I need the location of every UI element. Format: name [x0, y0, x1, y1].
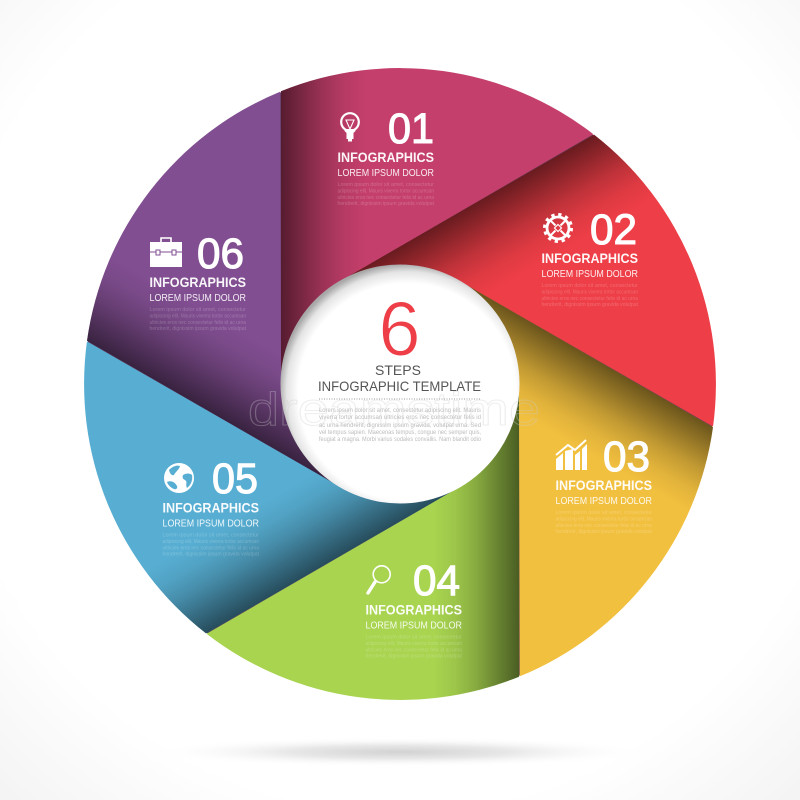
center body text: feugiat a magna. Morbi varius sodales convallis. Nam blandit odio: [319, 437, 482, 443]
sector: yellow: [303, 281, 733, 709]
step number: 03: [603, 433, 650, 481]
sector: purple: [67, 59, 497, 487]
step text: [556, 477, 653, 535]
step text: ultricies eros nec consectetur felis id ac urna: [556, 523, 652, 529]
step text: INFOGRAPHICS: [150, 274, 246, 290]
step text: [150, 274, 247, 332]
step text: Lorem ipsum dolor sit amet, consectetur: [366, 634, 462, 640]
step number: 06: [197, 230, 244, 278]
sector: green: [207, 384, 519, 700]
icon: globe: [164, 463, 194, 493]
sector: red: [340, 123, 770, 551]
step text: hendrerit, dignissim ipsum gravida volutpat: [162, 552, 260, 558]
center body text: Lorem ipsum dolor sit amet, consectetur adipiscing elit. Mauris: [319, 408, 481, 414]
template label: INFOGRAPHIC TEMPLATE: [318, 378, 481, 394]
step text: Lorem ipsum dolor sit amet, consectetur: [338, 182, 434, 188]
step text: ultricies eros nec consectetur felis id ac urna: [150, 320, 246, 326]
step text: Lorem ipsum dolor sit amet, consectetur: [150, 307, 246, 313]
step text: INFOGRAPHICS: [542, 250, 638, 266]
sector: blue: [30, 217, 460, 645]
panel: step 03: [303, 281, 733, 709]
icon: gear: [544, 214, 572, 242]
panel: step 01: [281, 68, 593, 384]
big number 6: 6: [378, 286, 420, 372]
panel: step 02: [340, 123, 770, 551]
step text: Lorem ipsum dolor sit amet, consectetur: [162, 532, 259, 538]
step text: adipiscing elit. Mauris viverra tortor accumsan: [556, 516, 652, 522]
step text: hendrerit, dignissim ipsum gravida volutpat: [366, 654, 463, 660]
step number: 04: [413, 557, 460, 605]
step number: 02: [590, 206, 637, 254]
step text: LOREM IPSUM DOLOR: [366, 620, 462, 632]
step text: ultricies eros nec consectetur felis id ac urna: [542, 296, 638, 302]
icon: bar chart: [556, 440, 587, 470]
step text: Lorem ipsum dolor sit amet, consectetur: [542, 283, 638, 289]
panel: step 06: [67, 59, 497, 487]
center disc: [280, 264, 520, 504]
step text: [366, 602, 463, 660]
step text: INFOGRAPHICS: [366, 602, 462, 618]
step text: [338, 149, 435, 207]
step text: INFOGRAPHICS: [338, 149, 434, 165]
center body text: viverra tortor accumsan ultricies eros nec consectetur felis id: [319, 415, 481, 421]
step text: hendrerit, dignissim ipsum gravida volutpat: [542, 302, 639, 308]
watermark: dreamstime: [248, 383, 540, 435]
step text: ultricies eros nec consectetur felis id ac urna: [366, 648, 462, 654]
wheel base: [85, 69, 715, 699]
step text: hendrerit, dignissim ipsum gravida volutpat: [150, 326, 247, 332]
step text: ultricies eros nec consectetur felis id ac urna: [338, 195, 434, 201]
steps label: STEPS: [375, 362, 421, 378]
step text: LOREM IPSUM DOLOR: [556, 495, 652, 507]
step text: adipiscing elit. Mauris viverra tortor accumsan: [542, 290, 638, 296]
center body text: ac urna hendrerit, dignissim ipsum gravida, volutpat urna. Sed: [319, 423, 481, 429]
step text: adipiscing elit. Mauris viverra tortor accumsan: [150, 314, 246, 320]
step text: Lorem ipsum dolor sit amet, consectetur: [556, 510, 652, 516]
step text: hendrerit, dignissim ipsum gravida volutpat: [556, 529, 653, 535]
icon: briefcase: [150, 238, 182, 267]
step text: hendrerit, dignissim ipsum gravida volutpat: [338, 201, 435, 207]
step text: LOREM IPSUM DOLOR: [338, 167, 434, 179]
panel: step 05: [30, 217, 460, 645]
step text: [162, 500, 260, 558]
step text: INFOGRAPHICS: [556, 477, 652, 493]
step text: LOREM IPSUM DOLOR: [162, 518, 259, 530]
center body text: vel tempus sapien. Maecenas tempus, congue nec semper quis,: [319, 430, 481, 436]
step text: adipiscing elit. Mauris viverra tortor accumsan: [366, 641, 462, 647]
step text: INFOGRAPHICS: [162, 500, 259, 516]
step number: 01: [388, 105, 434, 153]
step text: adipiscing elit. Mauris viverra tortor accumsan: [338, 188, 434, 194]
step text: [542, 250, 639, 308]
panel: center circle: [280, 264, 520, 504]
sector: pink: [281, 68, 593, 384]
panel: step 04: [207, 384, 519, 700]
icon: magnifier: [368, 566, 390, 593]
center body text: [319, 408, 482, 443]
step text: ultricies eros nec consectetur felis id ac urna: [162, 546, 259, 552]
step text: adipiscing elit. Mauris viverra tortor accumsan: [162, 539, 259, 545]
step text: LOREM IPSUM DOLOR: [542, 268, 638, 280]
step text: LOREM IPSUM DOLOR: [150, 292, 246, 304]
floor shadow: [150, 737, 650, 767]
icon: light bulb: [341, 113, 359, 142]
step number: 05: [212, 455, 258, 503]
